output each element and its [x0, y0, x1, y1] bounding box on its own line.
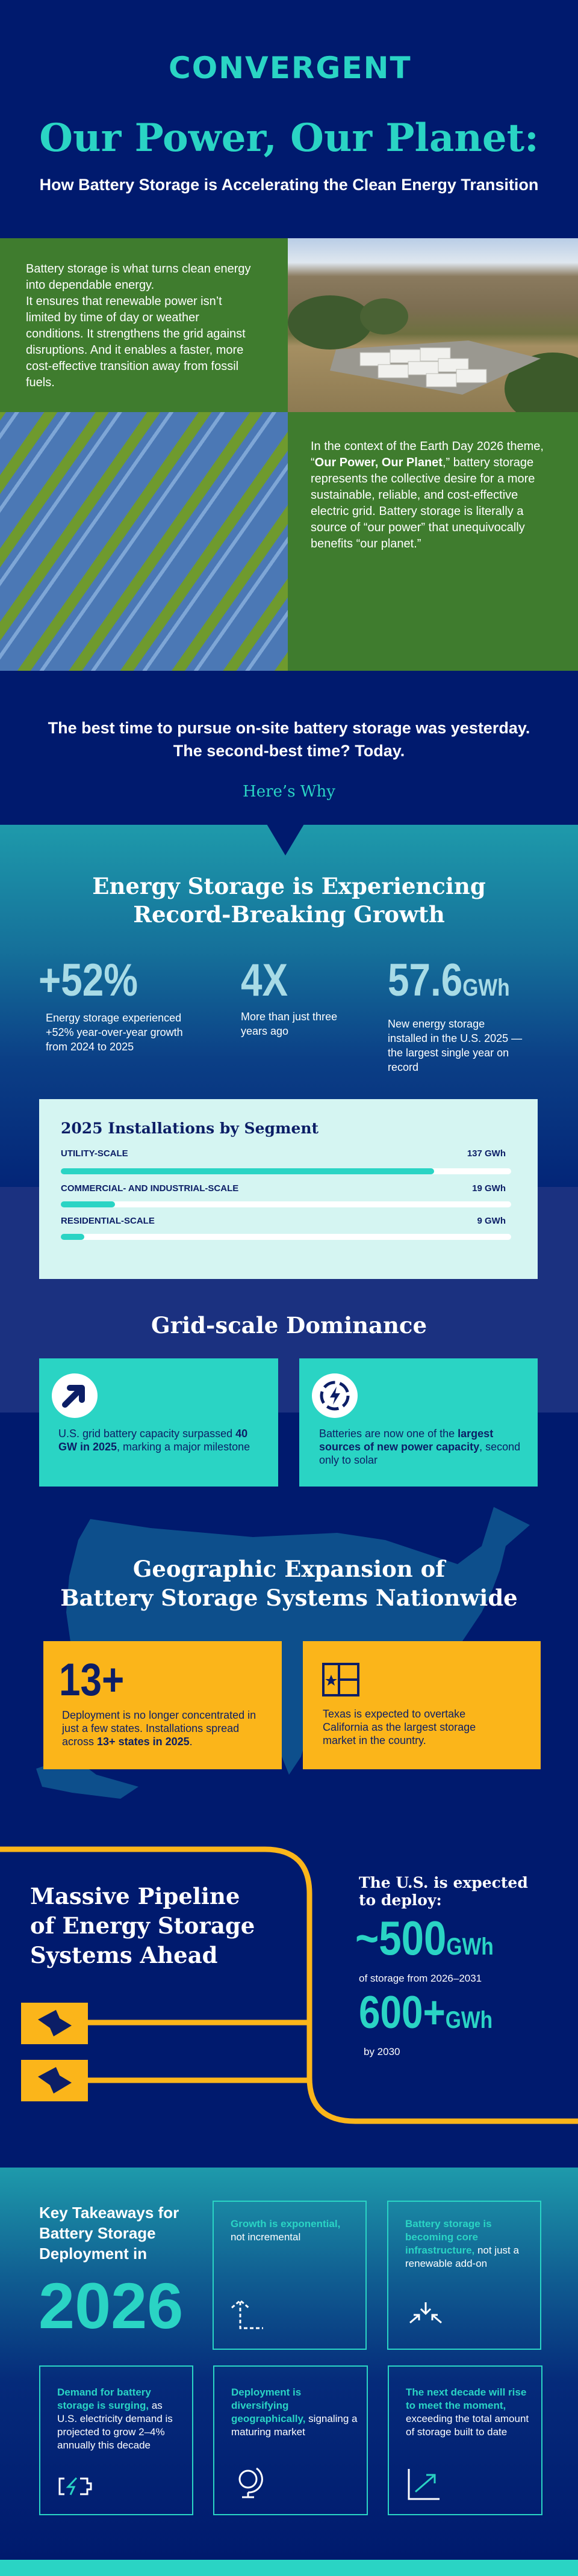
panel: 2025 installations by segment [39, 1099, 538, 1279]
pipeline stats: ~500GWh [355, 1911, 494, 1965]
pipeline stats [355, 1874, 528, 2057]
arrow: pointer triangle [267, 824, 304, 855]
quote section [0, 671, 578, 825]
pipeline stats: by 2030 [364, 2046, 400, 2057]
card: next decade: The next decade will rise to meet the moment, exceeding the total amount of storage built to date [406, 2386, 529, 2438]
bar: residential: RESIDENTIAL-SCALE [61, 1216, 155, 1226]
bar: residential [61, 1216, 511, 1240]
heading: geographic expansion: Battery Storage Systems Nationwide [60, 1585, 518, 1611]
heading: geographic expansion: Geographic Expansion of [133, 1556, 445, 1582]
photo: battery storage site [288, 238, 578, 412]
card: 13+ [43, 1641, 282, 1769]
stat: 4X: More than just three years ago [241, 1011, 337, 1037]
card: core infrastructure: Battery storage is becoming core infrastructure, not just a renewable add-on [405, 2218, 519, 2269]
stat: +52%: Energy storage experienced +52% year-over-year growth from 2024 to 2025 [46, 1012, 183, 1053]
heading: record-breaking growth: Energy Storage is Experiencing [92, 873, 486, 899]
here's why: Here’s Why [243, 783, 335, 801]
grid band background [0, 1187, 578, 1413]
card: exponential [213, 2201, 367, 2350]
card: 40 GW: U.S. grid battery capacity surpassed 40 GW in 2025, marking a major milestone [58, 1428, 250, 1453]
stat: 57.6GWh [388, 955, 523, 1073]
photo: solar panels aerial [0, 412, 288, 671]
pipeline stats: to deploy: [359, 1891, 442, 1909]
card: largest sources: Batteries are now one of the largest sources of new power capacity, second only to solar [319, 1428, 520, 1466]
pipeline connector lines [0, 1847, 578, 2124]
card: core infrastructure [387, 2201, 541, 2350]
card: diversifying [213, 2365, 368, 2515]
icon: battery bolt 1 [21, 2003, 88, 2044]
title: Our Power, Our Planet: [39, 116, 539, 161]
subtitle: How Battery Storage is Accelerating the Clean Energy Transition [40, 176, 538, 194]
bar: C&I [61, 1183, 511, 1207]
card: 13+: 13+ [59, 1654, 124, 1706]
stat: 57.6GWh: New energy storage installed in the U.S. 2025 — the largest single year on record [388, 1018, 522, 1073]
intro text: left green: It ensures that renewable power isn’t limited by time of day or weather conditions. It strengthens the grid against disruptions. And it enables a faster, more cost-effective transition away from fossil fuels. [26, 295, 246, 389]
icon: growth chart [408, 2469, 440, 2500]
card: texas: Texas is expected to overtake California as the largest storage market in the country. [323, 1708, 476, 1746]
card: texas [303, 1641, 541, 1769]
icon: battery charge [59, 2477, 92, 2495]
heading: geographic expansion [60, 1556, 518, 1611]
big year: 2026 [39, 2269, 183, 2342]
stat: +52%: +52% [39, 955, 138, 1006]
card: demand surging: Demand for battery storage is surging, as U.S. electricity demand is projected to grow 2–4% annually this decade [57, 2386, 173, 2451]
card: demand surging [39, 2365, 193, 2515]
card: largest sources [299, 1358, 538, 1487]
takeaways section [0, 2168, 578, 2560]
icon: dashed up arrow [231, 2300, 263, 2329]
quote [48, 719, 530, 760]
heading: record-breaking growth: Record-Breaking Growth [133, 901, 445, 928]
card: exponential: Growth is exponential, not incremental [231, 2218, 340, 2243]
logo: CONVERGENT [169, 51, 412, 85]
stat: 57.6GWh: 57.6GWh [388, 955, 510, 1006]
icon: arrow up-right [52, 1373, 98, 1418]
footer stripe [0, 2560, 578, 2576]
bar: utility: 137 GWh [467, 1148, 506, 1159]
header section [0, 0, 578, 238]
icon: battery bolt 2 [21, 2060, 88, 2101]
pipeline stats: of storage from 2026–2031 [359, 1973, 482, 1984]
heading: massive pipeline: Massive Pipeline of Energy Storage Systems Ahead [30, 1883, 255, 1968]
stat: 4X: 4X [241, 955, 288, 1006]
heading: key takeaways: Key Takeaways for Battery Storage Deployment in [39, 2204, 179, 2263]
heading: record-breaking growth [92, 873, 486, 928]
card: 40 GW [39, 1358, 278, 1487]
bar: C&I: COMMERCIAL- AND INDUSTRIAL-SCALE [61, 1183, 238, 1194]
panel: 2025 installations by segment: 2025 Installations by Segment [61, 1120, 319, 1137]
pipeline stats: The U.S. is expected [359, 1874, 528, 1891]
growth section background [0, 825, 578, 1187]
map: US silhouette [36, 1507, 530, 1799]
intro text: right green: In the context of the Earth Day 2026 theme, “Our Power, Our Planet,” battery storage represents the collective desire for a more sustainable, reliable, and cost-effective electric grid. Battery storage is literally a source of “our power” that unequivocally benefits “our planet.” [311, 440, 544, 550]
pipeline stats: 600+GWh [359, 1987, 493, 2038]
icon: texas flag [322, 1663, 359, 1696]
intro text: left green [0, 238, 288, 412]
bar: utility [61, 1148, 511, 1174]
icon: bolt circle [312, 1373, 358, 1418]
bar: utility: UTILITY-SCALE [61, 1148, 128, 1159]
quote: The second-best time? Today. [173, 742, 405, 760]
stat: +52% [39, 955, 183, 1053]
icon: converging arrows [409, 2302, 442, 2323]
intro text: left green: Battery storage is what turns clean energy into dependable energy. [26, 262, 251, 292]
card: 13+: Deployment is no longer concentrated in just a few states. Installations spread across 13+ states in 2025. [62, 1709, 256, 1748]
heading: grid-scale dominance: Grid-scale Dominance [151, 1312, 427, 1339]
intro text: right green [288, 412, 578, 671]
card: next decade [388, 2365, 542, 2515]
stat: 4X [241, 955, 337, 1037]
quote: The best time to pursue on-site battery storage was yesterday. [48, 719, 530, 737]
bar: C&I: 19 GWh [472, 1183, 506, 1194]
icon: globe [238, 2468, 263, 2498]
card: diversifying: Deployment is diversifying geographically, signaling a maturing market [231, 2386, 357, 2438]
bar: residential: 9 GWh [477, 1216, 506, 1226]
